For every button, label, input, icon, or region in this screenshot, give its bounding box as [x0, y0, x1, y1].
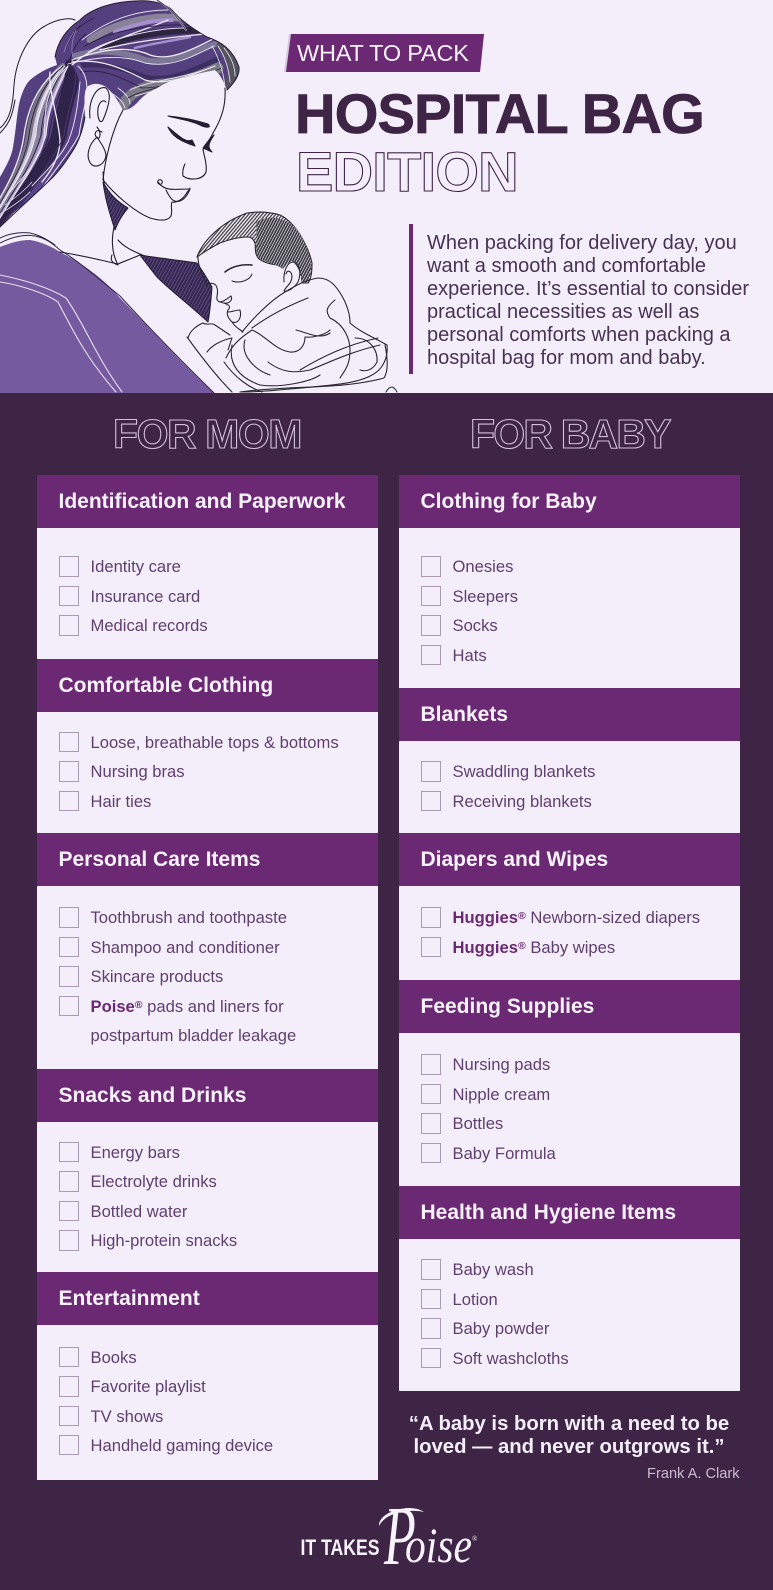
checklist: Socks [452, 616, 498, 635]
checklist: Skincare products [90, 967, 223, 986]
checklist: Bottled water [90, 1202, 187, 1221]
heading: Snacks and Drinks [58, 1084, 246, 1107]
neck shadow [103, 182, 128, 230]
dark background panel [0, 393, 773, 1590]
panel: health and hygiene items [398, 1186, 740, 1391]
checklist: Baby wash [452, 1260, 534, 1279]
checklist: Insurance card [90, 587, 200, 606]
checklist [59, 1142, 237, 1251]
quote: loved — and never outgrows it.” [413, 1436, 725, 1458]
crown strands [72, 20, 168, 65]
logo: it takes poise: ® [472, 1535, 478, 1543]
checklist: Medical records [90, 616, 208, 635]
checklist: Nursing pads [452, 1055, 550, 1074]
heading [398, 1186, 740, 1239]
heading [36, 659, 378, 712]
heading: Personal Care Items [58, 848, 260, 871]
checklist: Favorite playlist [90, 1377, 206, 1396]
baby hair shadow [256, 218, 311, 283]
checklist [421, 1259, 569, 1368]
checklist: Shampoo and conditioner [90, 938, 280, 957]
illustration: mother holding sleeping baby [0, 0, 398, 393]
ponytail strands [0, 66, 62, 215]
heading [398, 688, 740, 741]
checklist: Nipple cream [452, 1085, 550, 1104]
checklist: Huggies® Baby wipes [452, 938, 615, 957]
heading [36, 1069, 378, 1122]
heading: Feeding Supplies [420, 995, 594, 1018]
panel: snacks and drinks [36, 1069, 378, 1272]
blanket [240, 278, 387, 392]
intro accent bar [408, 224, 413, 374]
checklist: TV shows [90, 1406, 163, 1426]
heading: Blankets [420, 703, 508, 726]
heading [398, 475, 740, 528]
checklist: Lotion [452, 1290, 498, 1309]
logo: it takes poise: IT TAKES [300, 1535, 380, 1560]
heading: Entertainment [58, 1287, 200, 1310]
quote attribution: Frank A. Clark [647, 1466, 740, 1482]
heading [398, 980, 740, 1033]
checklist [59, 1347, 273, 1455]
checklist [59, 907, 296, 1045]
checklist: Nursing bras [90, 762, 185, 781]
logo: it takes poise [300, 1495, 478, 1580]
panel: identification and paperwork [36, 475, 378, 659]
panel: clothing for baby [398, 475, 740, 688]
checklist: Baby Formula [452, 1144, 556, 1163]
intro paragraph: experience. It’s essential to consider [427, 278, 749, 300]
heading: Diapers and Wipes [420, 848, 608, 871]
title: edition outline: EDITION [296, 140, 518, 203]
intro paragraph: want a smooth and comfortable [427, 255, 706, 277]
checklist: postpartum bladder leakage [90, 1026, 296, 1045]
baby hair [197, 212, 312, 283]
chest shadow [140, 255, 212, 322]
checklist: Loose, breathable tops & bottoms [90, 733, 339, 752]
title: hospital bag: HOSPITAL BAG [295, 82, 704, 145]
checklist: High-protein snacks [90, 1231, 237, 1250]
checklist: Huggies® Newborn-sized diapers [452, 908, 700, 927]
heading: Clothing for Baby [420, 490, 597, 513]
heading [36, 475, 378, 528]
checklist: Hair ties [90, 792, 151, 811]
panel: blankets [398, 688, 740, 833]
intro paragraph: personal comforts when packing a [427, 324, 730, 346]
checklist: Receiving blankets [452, 792, 592, 811]
checklist [421, 556, 518, 665]
panel: entertainment [36, 1272, 378, 1480]
checklist [59, 732, 339, 811]
checklist [421, 907, 700, 957]
face [60, 88, 225, 265]
quote [409, 1413, 729, 1458]
heading: Health and Hygiene Items [420, 1201, 676, 1224]
panel: diapers and wipes [398, 833, 740, 980]
badge: what to pack: WHAT TO PACK [297, 40, 469, 66]
checklist: Hats [452, 646, 487, 665]
heading [398, 833, 740, 886]
checklist: Electrolyte drinks [90, 1172, 217, 1191]
baby [187, 212, 397, 392]
checklist: Onesies [452, 557, 513, 576]
checklist: Poise® pads and liners for [90, 997, 284, 1016]
heading [36, 833, 378, 886]
intro paragraph [427, 232, 749, 369]
checklist: Soft washcloths [452, 1349, 569, 1368]
ponytail bands [0, 66, 63, 217]
heading: for baby: FOR BABY [470, 411, 670, 457]
checklist: Bottles [452, 1114, 503, 1133]
checklist: Handheld gaming device [90, 1436, 273, 1455]
panel: comfortable clothing [36, 659, 378, 833]
checklist: Energy bars [90, 1143, 180, 1162]
checklist: Baby powder [452, 1319, 549, 1338]
intro paragraph: hospital bag for mom and baby. [427, 347, 706, 369]
logo: it takes poise: oise [405, 1517, 472, 1573]
hair tie loop [0, 19, 75, 133]
quote: “A baby is born with a need to be [409, 1413, 729, 1435]
heading: Comfortable Clothing [58, 674, 273, 697]
checklist: Swaddling blankets [452, 762, 595, 781]
checklist: Identity care [90, 557, 181, 576]
checklist: Books [90, 1348, 137, 1367]
checklist [59, 556, 208, 636]
checklist: Sleepers [452, 587, 518, 606]
checklist: Toothbrush and toothpaste [90, 908, 287, 927]
heading [36, 1272, 378, 1325]
dress [0, 233, 214, 393]
badge: what to pack [284, 34, 484, 72]
hair [0, 0, 239, 232]
panel: personal care items [36, 833, 378, 1069]
checklist [421, 1054, 556, 1163]
heading: for mom: FOR MOM [113, 411, 301, 457]
checklist [421, 761, 595, 811]
intro paragraph: When packing for delivery day, you [427, 232, 737, 254]
heading: Identification and Paperwork [58, 490, 346, 513]
panel: feeding supplies [398, 980, 740, 1186]
crown bands [90, 17, 178, 40]
intro paragraph: practical necessities as well as [427, 301, 699, 323]
